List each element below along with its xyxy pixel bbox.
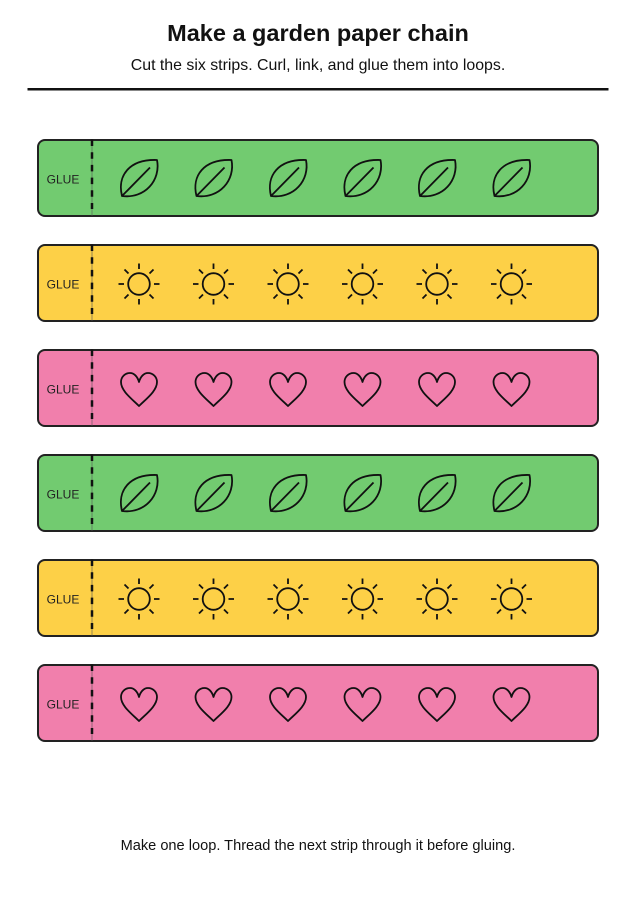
strip 1: green leaves bbox=[38, 140, 598, 216]
strip 3: pink hearts: GLUE bbox=[47, 382, 79, 396]
strip 4: green leaves bbox=[38, 454, 598, 531]
strip 3: pink hearts bbox=[38, 350, 598, 426]
strip 2: yellow suns bbox=[38, 244, 598, 321]
strip 2: yellow suns: GLUE bbox=[47, 278, 79, 292]
footer instruction: Make one loop. Thread the next strip through it before gluing. bbox=[121, 838, 515, 854]
header rule bbox=[28, 88, 608, 90]
strip 6: pink hearts: GLUE bbox=[47, 698, 79, 712]
strip 4: green leaves: GLUE bbox=[47, 488, 79, 502]
strip 5: yellow suns: GLUE bbox=[47, 592, 79, 606]
strip 6: pink hearts bbox=[38, 664, 598, 741]
strip 5: yellow suns bbox=[38, 560, 598, 636]
strip 1: green leaves: GLUE bbox=[47, 172, 79, 186]
title: Make a garden paper chain bbox=[167, 20, 469, 46]
subtitle: Cut the six strips. Curl, link, and glue them into loops. bbox=[131, 57, 505, 74]
